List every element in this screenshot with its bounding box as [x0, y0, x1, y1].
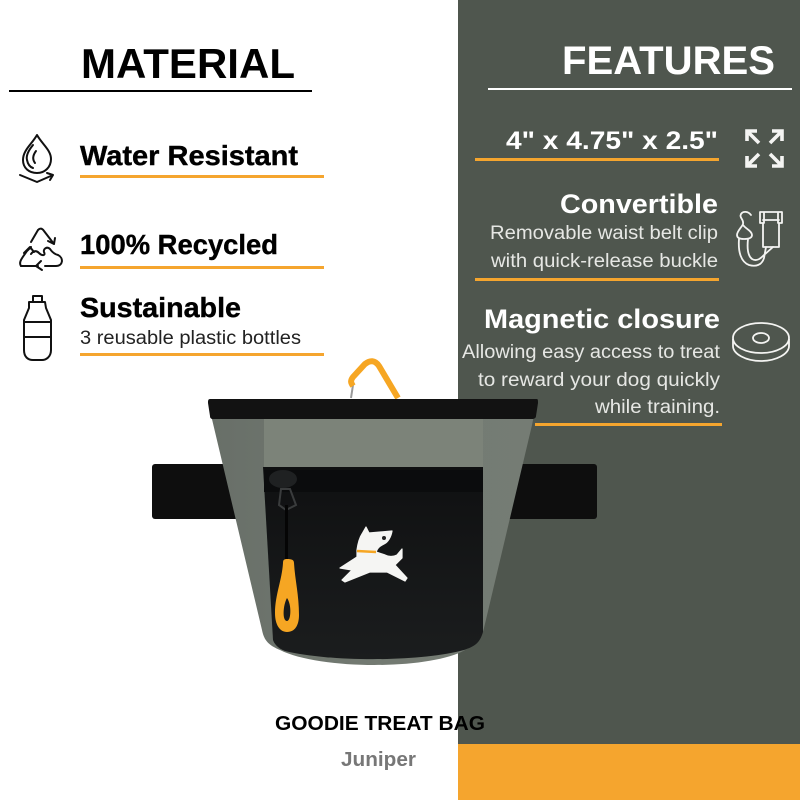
waist strap: [152, 464, 597, 519]
orange zipper loop: [275, 559, 299, 632]
text block: magnetic closure: Magnetic closure: [484, 304, 720, 334]
upper front panel: [264, 419, 483, 468]
black mesh pocket: [263, 467, 483, 659]
text block: magnetic closure: Allowing easy access to treat: [462, 342, 721, 363]
carabiner clip: [351, 361, 398, 398]
icon: plastic bottle: [24, 296, 51, 360]
text block: convertible: Convertible: [560, 189, 718, 219]
black rim: [208, 399, 538, 419]
icon: belt clip: [737, 212, 782, 266]
icon: recycle: [20, 229, 62, 270]
heading: features: FEATURES: [562, 39, 775, 83]
icon: expand arrows: [747, 131, 782, 166]
dog logo: [340, 527, 407, 582]
text block: dimensions: [475, 127, 719, 161]
heading: material: MATERIAL: [81, 40, 295, 87]
text block: magnetic closure: while training.: [594, 397, 720, 418]
text block: 100% recycled: [80, 229, 324, 269]
icon: magnet disc: [733, 323, 789, 361]
text block: convertible: with quick-release buckle: [490, 251, 718, 272]
panel: orange footer block: [458, 744, 800, 800]
pocket zipper band: [264, 470, 483, 492]
text block: magnetic closure: to reward your dog quickly: [478, 370, 721, 391]
caption: product name: GOODIE TREAT BAG: [275, 713, 485, 735]
bag body: [211, 415, 534, 665]
text block: convertible: Removable waist belt clip: [490, 223, 718, 244]
text block: magnetic closure: [462, 304, 722, 426]
zipper pull: [269, 470, 297, 560]
text block: sustainable: Sustainable: [80, 292, 241, 323]
text block: convertible: [475, 189, 719, 281]
text block: dimensions: 4" x 4.75" x 2.5": [506, 127, 718, 155]
text block: sustainable: [80, 292, 324, 356]
text block: 100% recycled: 100% Recycled: [80, 229, 278, 260]
panel: features background: [458, 0, 800, 744]
product photo: treat bag: [152, 361, 597, 665]
caption: colour name: Juniper: [341, 749, 416, 771]
text block: sustainable: 3 reusable plastic bottles: [80, 328, 301, 349]
text block: water resistant: Water Resistant: [80, 140, 298, 171]
icon: water drop: [20, 135, 53, 182]
